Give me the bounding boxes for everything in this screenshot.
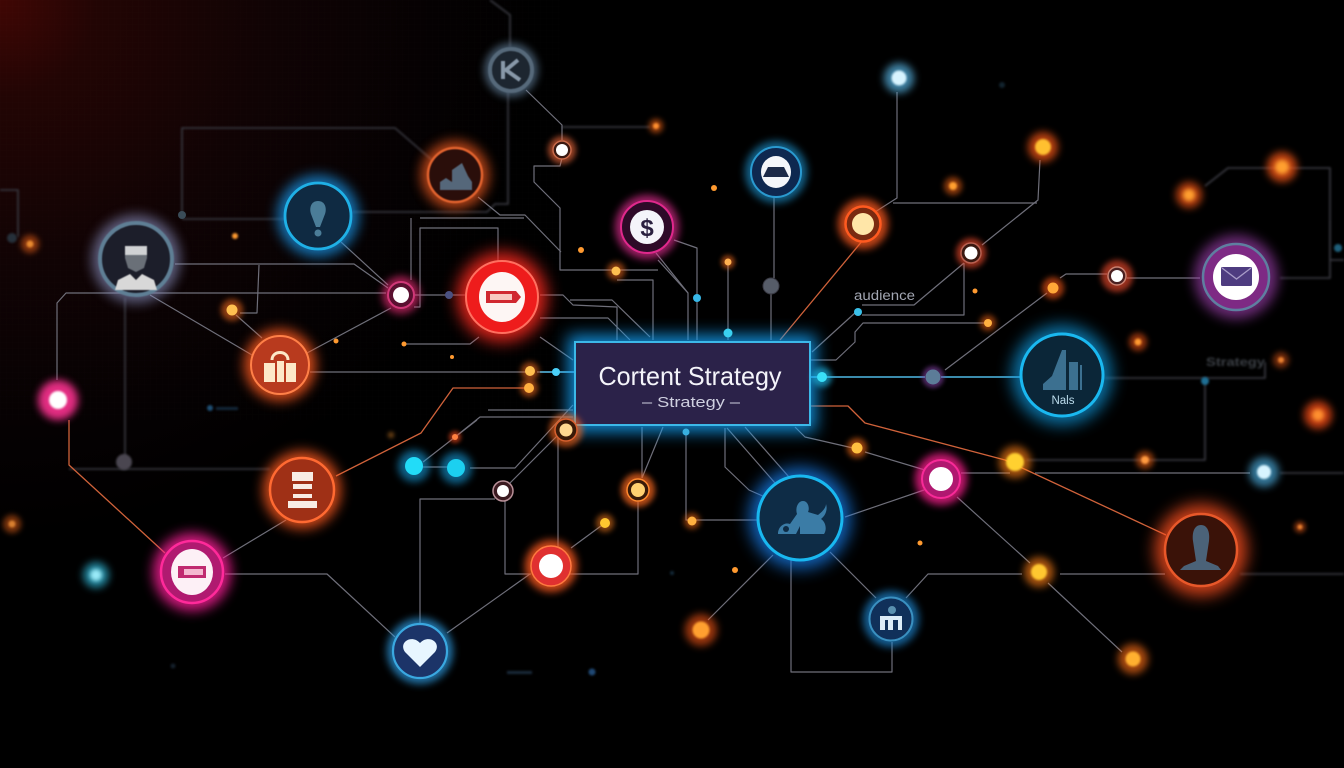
faint distant marks <box>170 82 1005 676</box>
node: blue exclamation <box>277 175 359 257</box>
node: orange chart <box>421 141 489 209</box>
glowing orange dots <box>3 119 1332 674</box>
label: audience: audience <box>854 288 915 303</box>
box title: Cortent Strategy <box>598 361 782 391</box>
node: dollar <box>615 195 679 259</box>
node: red small <box>525 540 577 592</box>
node: heart <box>387 618 453 684</box>
bar chart label: Nals <box>1051 395 1075 407</box>
node: blue badge <box>745 141 807 203</box>
node: red pencil <box>457 252 547 342</box>
node: pink battery <box>153 533 231 611</box>
tiny spark dots <box>232 185 978 573</box>
node: orange amber <box>838 199 888 249</box>
label: faded strategy: Strategy <box>1206 355 1265 369</box>
node: orange database <box>263 451 341 529</box>
node: pink junction <box>382 276 420 314</box>
box subtitle: – Strategy – <box>642 394 741 411</box>
small ring nodes <box>493 136 1133 507</box>
node: person <box>92 215 180 303</box>
white-cyan glow dots <box>83 63 1279 588</box>
connector lines: dim <box>0 0 1344 574</box>
node: pink white <box>915 453 967 505</box>
node: big blue people <box>749 467 851 569</box>
node: K icon <box>484 43 538 97</box>
connector lines: gray <box>57 90 1250 672</box>
node: dollar: $ <box>640 215 654 242</box>
node: envelope <box>1194 235 1278 319</box>
node: pink glow <box>38 380 78 420</box>
node: orange person <box>1155 504 1247 596</box>
node: orange gift <box>244 329 316 401</box>
connector lines: cyan <box>540 372 1022 377</box>
cyan dots <box>398 294 862 484</box>
connector lines: orange <box>69 240 1166 553</box>
gray connector dots <box>7 211 1342 470</box>
central box: Content Strategy <box>568 335 816 432</box>
node: bar chart <box>1012 325 1112 425</box>
node: small blue people <box>863 591 919 647</box>
